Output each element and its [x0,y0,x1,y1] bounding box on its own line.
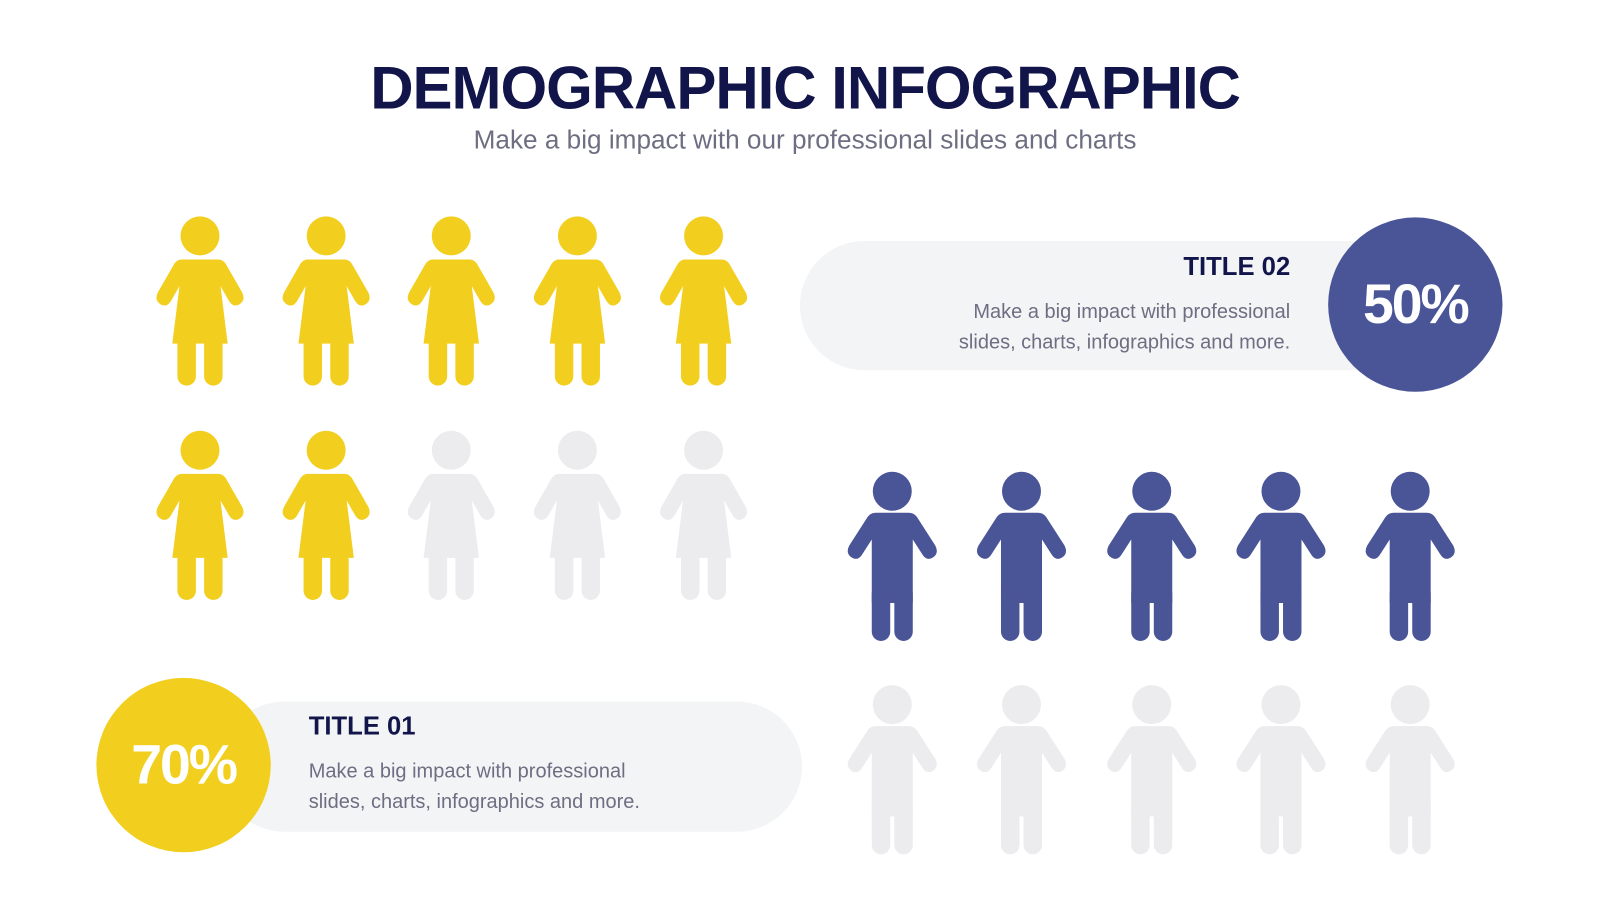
text: title 01: Make a big impact with professional slides, charts, infographics and more. [309,760,640,813]
circle: 50%: 50% [1363,274,1468,335]
title: DEMOGRAPHIC INFOGRAPHIC [370,55,1240,122]
heading: title 02: TITLE 02 [1183,252,1290,281]
panel: title 02 [800,217,1502,392]
subtitle: Make a big impact with our professional slides and charts [474,126,1137,155]
circle: 50% [1328,217,1503,392]
text: title 02: Make a big impact with professional slides, charts, infographics and more. [959,301,1290,354]
circle: 70%: 70% [131,734,236,796]
heading: title 01: TITLE 01 [309,712,416,740]
circle: 70% [96,678,271,852]
panel: title 01 [96,293,802,852]
female icons: 7 of 10 highlighted [156,216,747,600]
male icons: 5 of 10 highlighted [848,472,1455,854]
